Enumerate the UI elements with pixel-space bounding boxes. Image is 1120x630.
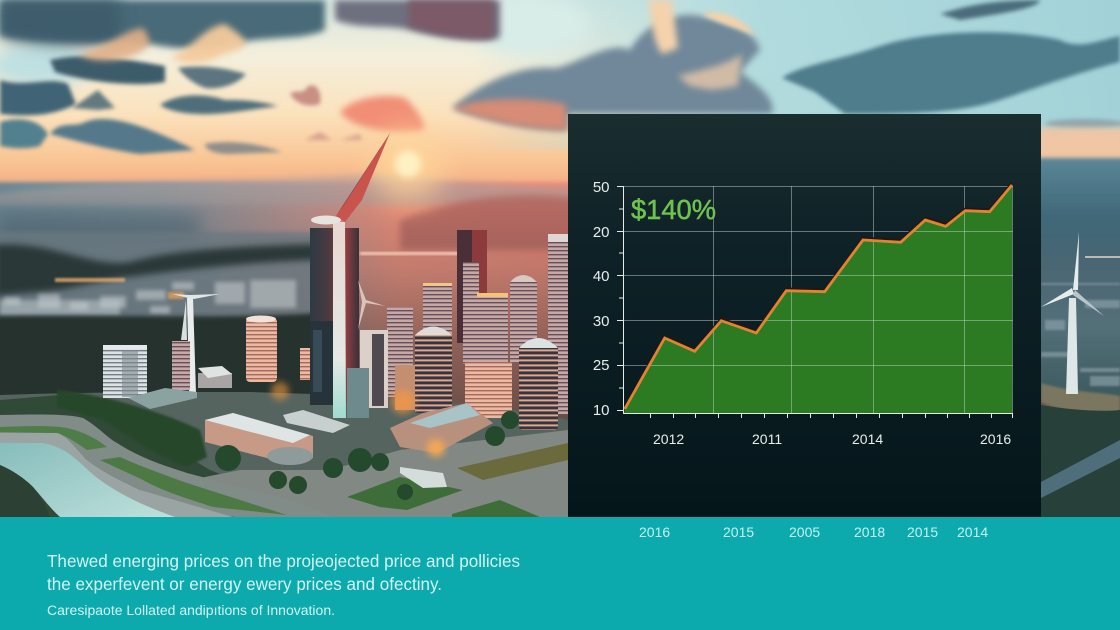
- clouds: right bank: [782, 0, 1120, 129]
- sun: [372, 129, 444, 201]
- right strip: distant city and land: [1035, 128, 1120, 517]
- y axis labels: 25: [593, 357, 610, 374]
- foreground ground: [0, 392, 568, 517]
- plazas and small building: [347, 443, 568, 517]
- callout: percent: $140%: [631, 194, 716, 225]
- clouds: left bank: [0, 80, 282, 154]
- large wind turbine: [311, 133, 390, 418]
- grid lines: [623, 186, 1013, 413]
- lower year labels: 2015: [723, 524, 754, 540]
- x axis labels: 2012: [653, 431, 684, 447]
- x axis labels: 2014: [852, 431, 883, 447]
- area fill: [624, 185, 1012, 413]
- caption text: Thewed energing prices on the projeojected price and pollicies: [47, 551, 520, 571]
- clouds: cumulus centre: [452, 0, 773, 130]
- x axis labels: 2016: [980, 431, 1011, 447]
- distant city left: [0, 232, 335, 322]
- building cluster behind: [300, 230, 568, 414]
- teal footer band: [0, 517, 1120, 630]
- dark tower: [310, 228, 359, 405]
- right wind turbine: [1041, 232, 1104, 394]
- low pavilions: [205, 403, 493, 465]
- caption text: [47, 551, 520, 618]
- caption text: the experfevent or energy ewery prices and ofectiny.: [47, 574, 442, 594]
- line shadow: [625, 183, 1012, 407]
- lawns and tree belt: [0, 390, 330, 517]
- buildings left: [103, 341, 232, 409]
- background photo: sky: [0, 0, 1120, 190]
- y axis labels: 10: [593, 402, 610, 419]
- x axis labels: 2011: [752, 431, 782, 447]
- caption text: Caresipaote Lollated andipıtions of Innovation.: [47, 603, 335, 618]
- lower year labels: [639, 524, 988, 540]
- clouds: pink: [290, 85, 424, 140]
- background photo: distant land: [0, 174, 1120, 522]
- round tower: [246, 316, 289, 400]
- lower year labels: 2018: [854, 524, 885, 540]
- lower year labels: 2014: [957, 524, 988, 540]
- lower year labels: 2015: [907, 524, 938, 540]
- x axis labels: [653, 431, 1011, 447]
- dark forest band: [0, 312, 335, 420]
- clouds: upper left: [0, 0, 500, 88]
- y axis labels: 30: [593, 313, 610, 330]
- lower year labels: 2016: [639, 524, 670, 540]
- y axis labels: 20: [593, 224, 610, 241]
- y axis labels: [593, 179, 610, 419]
- chart panel: [568, 114, 1041, 517]
- lower year labels: 2005: [789, 524, 820, 540]
- small wind turbine left: [172, 294, 220, 394]
- y axis labels: 40: [593, 268, 610, 285]
- curved roads and water: [0, 414, 335, 517]
- axes and ticks: [617, 186, 1013, 418]
- y axis labels: 50: [593, 179, 610, 196]
- mid buildings: [347, 326, 558, 430]
- trees: [215, 411, 519, 500]
- paved plaza: [200, 430, 568, 517]
- price line: [625, 185, 1012, 409]
